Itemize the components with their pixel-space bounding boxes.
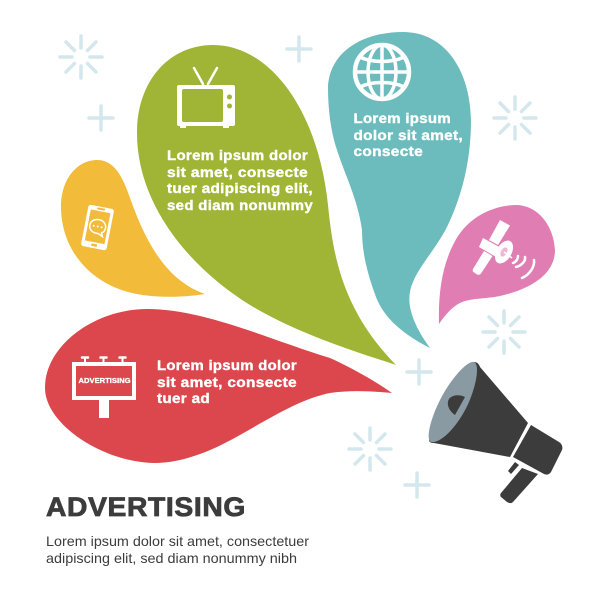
panel: pink bubble bbox=[439, 205, 555, 324]
icon: smartphone with chat bubble bbox=[81, 204, 114, 251]
panel: olive bubble bbox=[137, 45, 396, 365]
text block: olive bubble: sed diam nonummy bbox=[167, 197, 313, 213]
decorative sparkle top left bbox=[60, 36, 102, 78]
panel: red bubble bbox=[45, 309, 392, 463]
icon: globe bbox=[355, 45, 409, 99]
title: ADVERTISING bbox=[46, 492, 246, 522]
icon: megaphone bbox=[429, 362, 562, 503]
icon: billboard bbox=[74, 358, 134, 418]
icon: television bbox=[177, 68, 235, 128]
decorative sparkle right bbox=[494, 97, 536, 139]
text block: olive bubble: sit amet, consecte bbox=[167, 164, 308, 180]
icon: billboard: ADVERTISING bbox=[78, 376, 131, 385]
decorative sparkle near megaphone bbox=[349, 428, 391, 470]
text block: olive bubble: tuer adipiscing elit, bbox=[167, 180, 313, 196]
text block: red bubble: Lorem ipsum dolor bbox=[157, 357, 297, 373]
text block: olive bubble: Lorem ipsum dolor bbox=[167, 147, 308, 163]
text block: description: adipiscing elit, sed diam nonummy nibh bbox=[46, 550, 297, 566]
text block: teal bubble bbox=[354, 110, 463, 159]
text block: description bbox=[46, 533, 309, 566]
decorative sparkle lower right bbox=[483, 311, 525, 353]
text block: teal bubble: consecte bbox=[354, 143, 423, 159]
text block: teal bubble: Lorem ipsum bbox=[354, 110, 451, 126]
text block: description: Lorem ipsum dolor sit amet, consectetuer bbox=[46, 533, 309, 549]
panel: yellow bubble bbox=[61, 160, 205, 297]
decorative plus signs bbox=[89, 37, 431, 497]
text block: olive bubble bbox=[167, 147, 313, 213]
text block: teal bubble: dolor sit amet, bbox=[354, 127, 463, 143]
text block: red bubble: sit amet, consecte bbox=[157, 374, 297, 390]
panel: teal bubble bbox=[328, 32, 471, 348]
icon: satellite bbox=[473, 220, 534, 278]
text block: red bubble: tuer ad bbox=[157, 390, 210, 406]
text block: red bubble bbox=[157, 357, 297, 406]
